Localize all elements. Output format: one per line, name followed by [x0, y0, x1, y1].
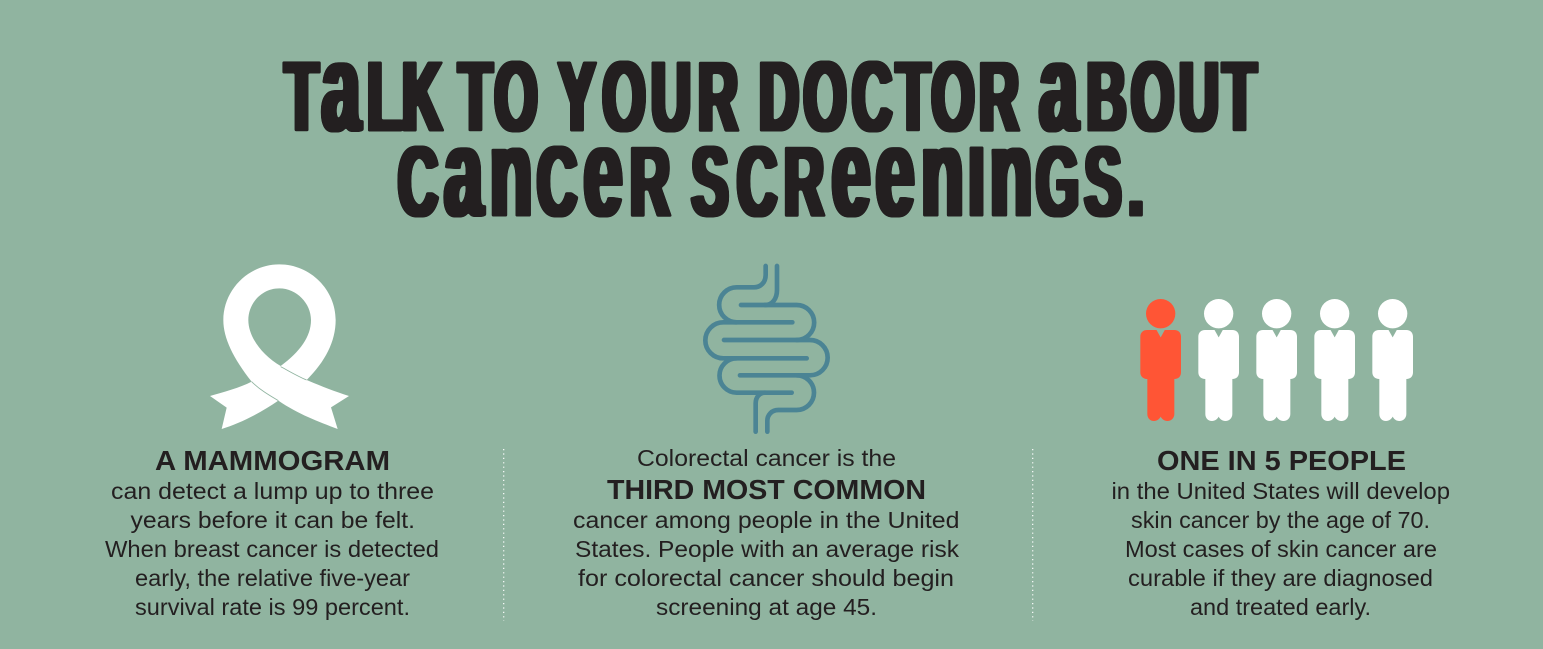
text block: skin cancer details: skin cancer by the age of 70. — [1131, 507, 1430, 533]
icon: white person 5 — [1372, 299, 1413, 421]
text block: mammogram details: early, the relative five-year — [135, 565, 410, 591]
heading: a mammogram: A MAMMOGRAM — [155, 445, 390, 476]
text block: skin cancer details: in the United States will develop — [1112, 478, 1450, 504]
title: CanCeR SCReenInGS. — [398, 102, 1144, 243]
heading: third most common: THIRD MOST COMMON — [607, 474, 926, 505]
title: TaLK TO YOUR DOCTOR aBOUT — [285, 17, 1256, 158]
title — [285, 17, 1256, 243]
text: colorectal intro: Colorectal cancer is the — [637, 445, 896, 471]
text block: colorectal details: for colorectal cancer should begin — [578, 565, 954, 591]
panel: colorectal cancer — [573, 266, 960, 620]
text block: mammogram details: years before it can be felt. — [130, 507, 415, 533]
text block: skin cancer details — [1112, 478, 1450, 620]
icon: red person — [1140, 299, 1181, 421]
text block: skin cancer details: curable if they are diagnosed — [1128, 565, 1433, 591]
text block: mammogram details: survival rate is 99 percent. — [135, 594, 410, 620]
text block: colorectal details: screening at age 45. — [656, 594, 877, 620]
panel: mammogram — [105, 264, 439, 620]
text block: mammogram details: When breast cancer is detected — [105, 536, 439, 562]
icon: five people, one highlighted — [1140, 299, 1413, 421]
text block: skin cancer details: Most cases of skin cancer are — [1125, 536, 1437, 562]
text block: skin cancer details: and treated early. — [1190, 594, 1371, 620]
icon: awareness ribbon — [210, 264, 349, 429]
text block: mammogram details — [105, 478, 439, 620]
panel: skin cancer — [1112, 299, 1450, 620]
text block: colorectal details: cancer among people in the United — [573, 507, 960, 533]
heading: one in 5 people: ONE IN 5 PEOPLE — [1157, 445, 1406, 476]
icon: white person 4 — [1314, 299, 1355, 421]
icon: white person 3 — [1256, 299, 1297, 421]
icon: white person 2 — [1198, 299, 1239, 421]
text block: mammogram details: can detect a lump up to three — [111, 478, 434, 504]
text block: colorectal details: States. People with an average risk — [575, 536, 960, 562]
icon: intestines — [705, 266, 828, 432]
text block: colorectal details — [573, 507, 960, 620]
